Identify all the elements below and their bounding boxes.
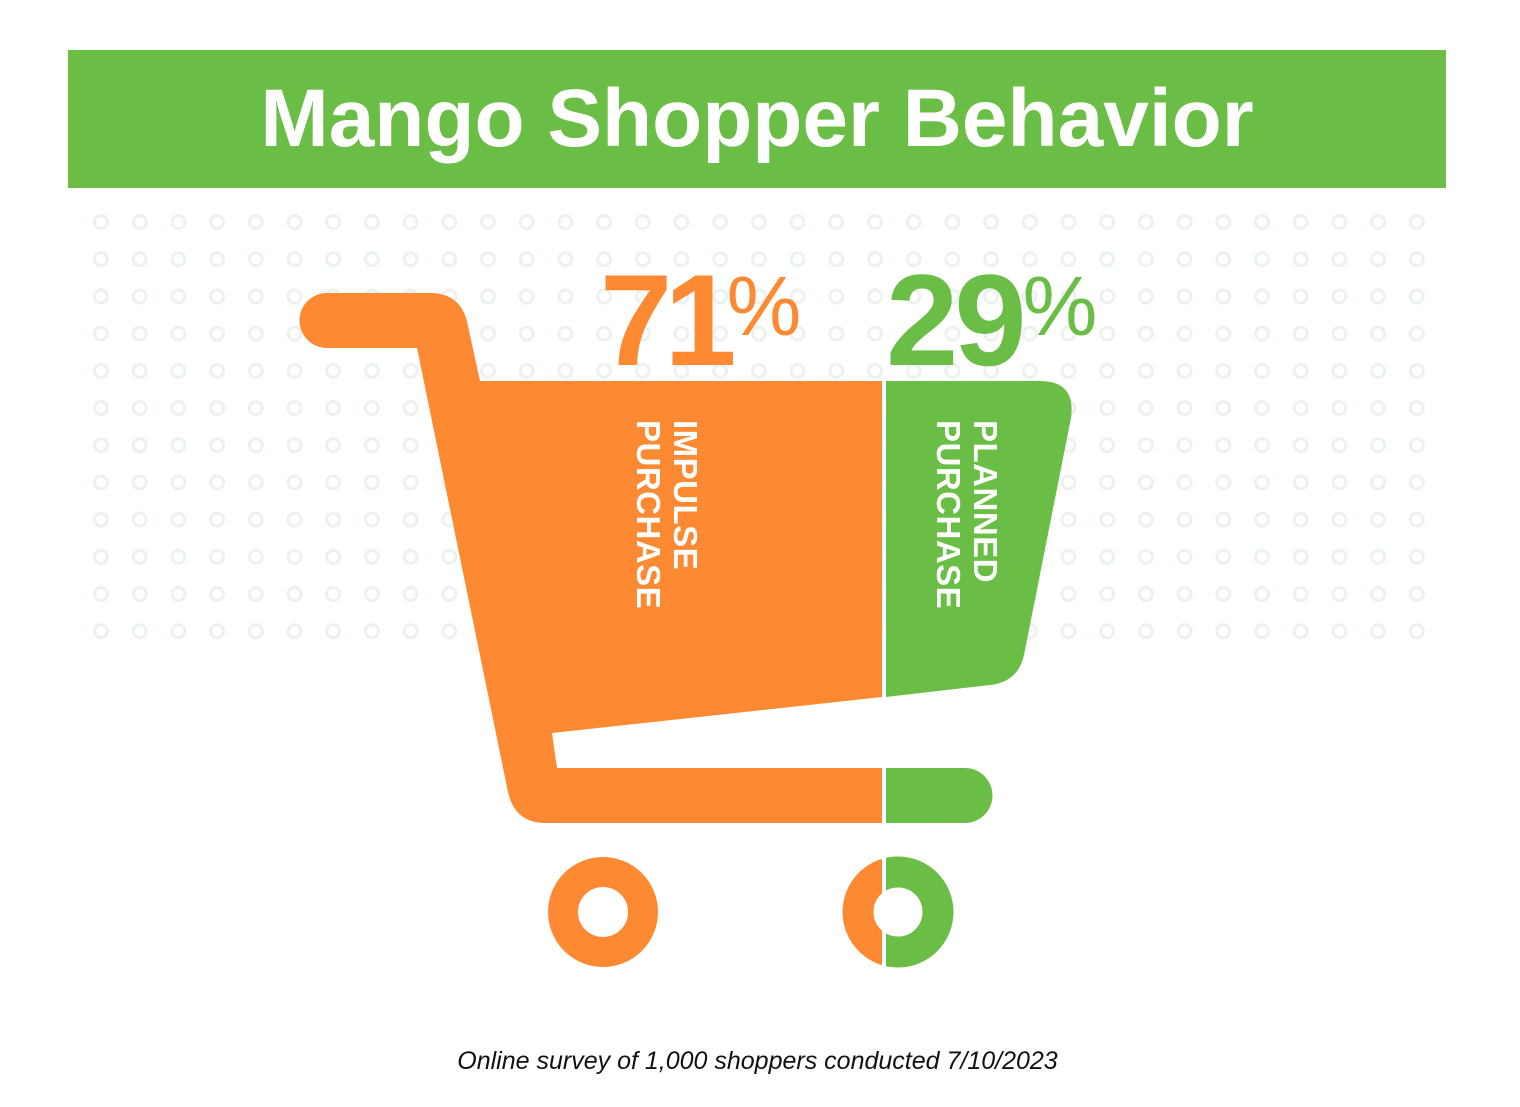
title banner — [68, 50, 1446, 188]
footnote: Online survey of 1,000 shoppers conducted 7/10/2023 — [457, 1047, 1058, 1075]
label: impulse purchase: PURCHASE — [630, 420, 667, 609]
title banner: Mango Shopper Behavior — [260, 73, 1254, 164]
label: planned purchase: PLANNED — [967, 420, 1004, 583]
stat: 29%: 29% — [886, 247, 1097, 393]
cart green planned part — [886, 381, 1072, 968]
label: planned purchase — [930, 420, 1004, 609]
label: impulse purchase — [630, 420, 704, 609]
cart orange impulse part — [299, 293, 938, 952]
shopping cart chart — [300, 293, 1072, 968]
stat: 71%: 71% — [600, 247, 801, 393]
label: impulse purchase: IMPULSE — [667, 420, 704, 570]
label: planned purchase: PURCHASE — [930, 420, 967, 609]
